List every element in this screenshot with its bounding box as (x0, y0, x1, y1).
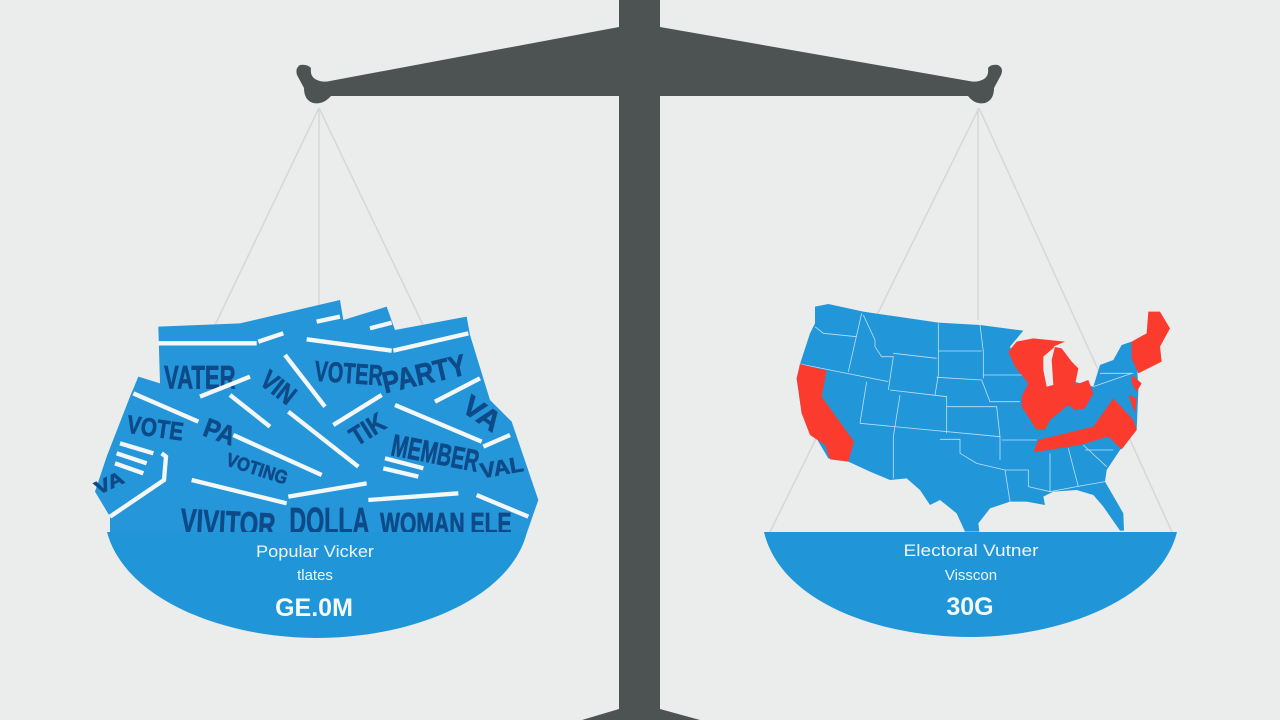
left pan (107, 532, 527, 638)
right pan (764, 532, 1177, 637)
ballot text: DOLLA (289, 500, 369, 541)
left pan strings (215, 108, 423, 325)
pan label: Popular Vicker (256, 542, 374, 561)
pan value: 30G (946, 593, 994, 621)
ballot text: PARTY (379, 349, 469, 400)
ballot silhouette (95, 300, 538, 533)
ballot text: MEMBER (389, 428, 482, 479)
ballot text: VIN (255, 364, 302, 411)
pan bowl (764, 532, 1177, 637)
red states: Great Lakes (1008, 338, 1093, 430)
state borders (800, 313, 1133, 502)
pan sublabel: Visscon (945, 567, 997, 584)
ballot text (91, 349, 525, 545)
red states: mid Atlantic (1128, 375, 1142, 413)
ballot text: VIVITOR (180, 503, 276, 545)
red states: Tennessee, Virginia, North Carolina (1033, 398, 1137, 452)
ballot text: WOMAN ELE (380, 507, 512, 540)
red states: New England (1132, 312, 1170, 373)
scale post and beam (296, 0, 1002, 720)
ballot text: TIK (344, 407, 391, 452)
right pan strings (770, 108, 1172, 532)
map base (797, 304, 1138, 532)
ballot text: VAL (478, 452, 525, 483)
pan bowl (107, 532, 527, 638)
red states: California (797, 364, 854, 462)
ballot stripes (110, 317, 528, 517)
ballot pile (91, 300, 538, 545)
ballot text: VOTER (314, 356, 384, 392)
ballot text: PA (200, 412, 240, 451)
ballot text: VATER (164, 359, 236, 395)
ballot text: VA (456, 390, 507, 439)
pan label: Electoral Vutner (904, 541, 1039, 560)
lake michigan (1043, 347, 1055, 387)
ballot text: VA (91, 467, 127, 499)
US map (797, 304, 1170, 532)
pan sublabel: tlates (297, 567, 333, 584)
ballot text: VOTE (125, 411, 185, 446)
pan value: GE.0M (275, 594, 353, 622)
ballot text: VOTING (224, 449, 290, 488)
